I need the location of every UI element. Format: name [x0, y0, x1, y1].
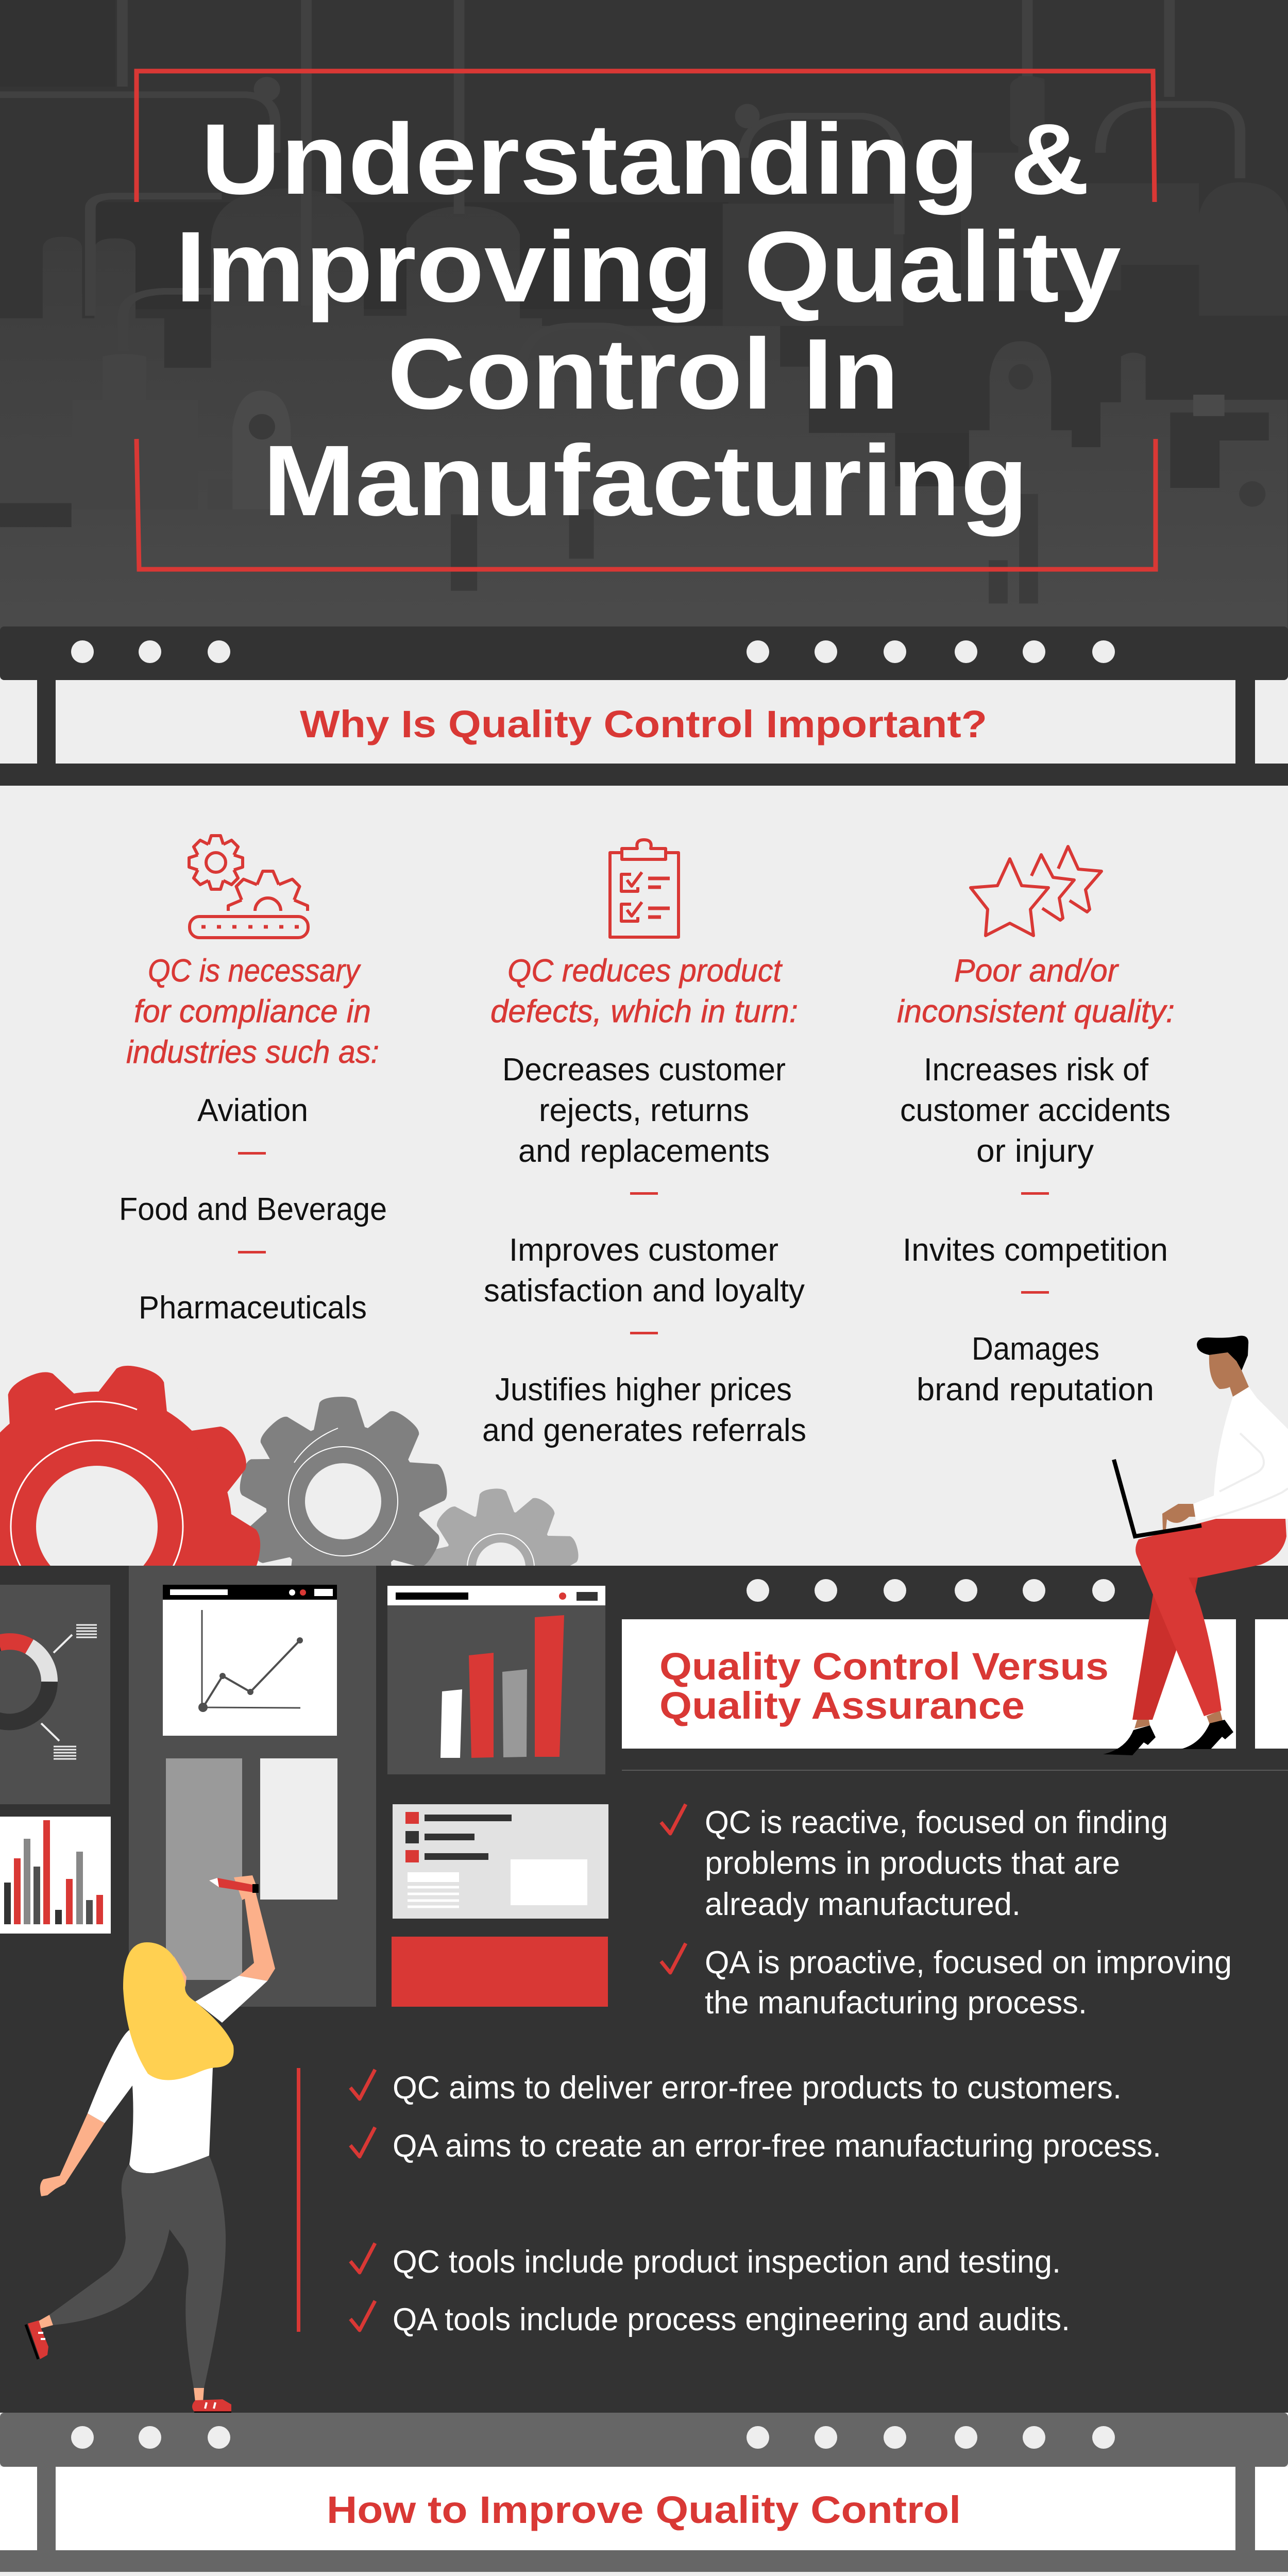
column 1: compliance: industries such as:: [126, 1035, 379, 1070]
text block: reactive versus proactive: problems in products that are: [705, 1845, 1120, 1881]
chart: rising bar chart window: [387, 1586, 605, 1774]
column 3: poor quality: or injury: [976, 1133, 1094, 1169]
chart: small bar chart: [0, 1817, 111, 1934]
text block: aims and tools: QC aims to deliver error-free products to customers.: [393, 2070, 1122, 2106]
column 3: poor quality: Invites competition: [903, 1232, 1168, 1268]
heading: quality control versus quality assurance: [659, 1645, 1109, 1727]
text block: reactive versus proactive: the manufacturing process.: [705, 1985, 1087, 2021]
panel: why background: [0, 786, 1288, 1566]
column 3: poor quality: Increases risk of: [924, 1052, 1149, 1088]
band: dots and banner: [622, 1579, 1288, 1771]
title: Improving Quality: [175, 211, 1121, 323]
illustration: woman drawing on board: [26, 1875, 275, 2412]
title: Understanding &: [201, 103, 1090, 215]
column 1: compliance: Pharmaceuticals: [139, 1290, 367, 1326]
section band: why QC is important: [0, 626, 1288, 786]
heading: quality control versus quality assurance: Quality Control Versus: [659, 1645, 1109, 1688]
title frame: [137, 71, 1156, 569]
text block: reactive versus proactive: already manufactured.: [705, 1887, 1021, 1922]
column 2: reduces defects: [482, 953, 806, 1448]
column 2: reduces defects: and replacements: [518, 1133, 770, 1169]
icon: three stars: [971, 846, 1101, 936]
column 1: compliance: [119, 953, 387, 1326]
title: Manufacturing: [263, 425, 1028, 537]
column 2: reduces defects: rejects, returns: [539, 1093, 749, 1128]
header background with machinery silhouette: [0, 0, 1288, 634]
panel: list window: [393, 1804, 608, 1919]
column 3: poor quality: inconsistent quality:: [897, 994, 1175, 1029]
column 3: poor quality: customer accidents: [900, 1093, 1171, 1128]
panel: how to improve background: [0, 2572, 1288, 2576]
column 1: compliance: QC is necessary: [148, 953, 362, 989]
column 3: poor quality: Damages: [972, 1331, 1099, 1367]
column 2: reduces defects: defects, which in turn:: [490, 994, 798, 1029]
text block: aims and tools: QA aims to create an error-free manufacturing process.: [393, 2128, 1161, 2164]
text block: reactive versus proactive: QA is proactive, focused on improving: [705, 1945, 1232, 1980]
icon: clipboard checklist: [610, 840, 679, 937]
heading: how to improve quality control: How to Improve Quality Control: [327, 2488, 961, 2531]
illustration: grey gear: [235, 1396, 451, 1608]
panel: red block: [392, 1937, 608, 2007]
section band: how to improve: [0, 2413, 1288, 2572]
icon: gears on conveyor: [189, 836, 308, 938]
column 3: poor quality: Poor and/or: [954, 953, 1119, 989]
chart: line chart window: [163, 1585, 337, 1736]
title: [175, 103, 1121, 537]
illustration: red gear: [0, 1358, 266, 1678]
title: Control In: [387, 318, 899, 430]
panel: centre display board: [129, 1566, 376, 2007]
text block: aims and tools: QA tools include process engineering and audits.: [393, 2302, 1070, 2337]
column 1: compliance: for compliance in: [134, 994, 371, 1029]
column 2: reduces defects: and generates referrals: [482, 1413, 806, 1448]
column 2: reduces defects: Justifies higher prices: [495, 1372, 792, 1408]
column 2: reduces defects: Decreases customer: [502, 1052, 786, 1088]
column 1: compliance: Food and Beverage: [119, 1192, 387, 1227]
illustration: light grey gear: [421, 1487, 582, 1624]
text block: aims and tools: [350, 2070, 1161, 2337]
heading: quality control versus quality assurance: Quality Assurance: [659, 1684, 1025, 1727]
text block: aims and tools: QC tools include product inspection and testing.: [393, 2244, 1061, 2280]
divider line: red vertical rule: [297, 2068, 300, 2332]
panel: donut chart screen: [0, 1585, 110, 1804]
column 2: reduces defects: QC reduces product: [507, 953, 783, 989]
column 3: poor quality: brand reputation: [917, 1372, 1154, 1408]
panel: quality control versus quality assurance: [0, 1566, 1288, 2413]
text block: reactive versus proactive: [661, 1804, 1232, 2021]
heading: why is quality control important: Why Is Quality Control Important?: [300, 703, 987, 745]
column 2: reduces defects: satisfaction and loyalty: [484, 1273, 805, 1309]
column 1: compliance: Aviation: [197, 1093, 308, 1128]
column 3: poor quality: [897, 953, 1175, 1408]
text block: reactive versus proactive: QC is reactive, focused on finding: [705, 1805, 1168, 1840]
column 2: reduces defects: Improves customer: [509, 1232, 778, 1268]
illustration: seated man with laptop: [1103, 1336, 1288, 1755]
